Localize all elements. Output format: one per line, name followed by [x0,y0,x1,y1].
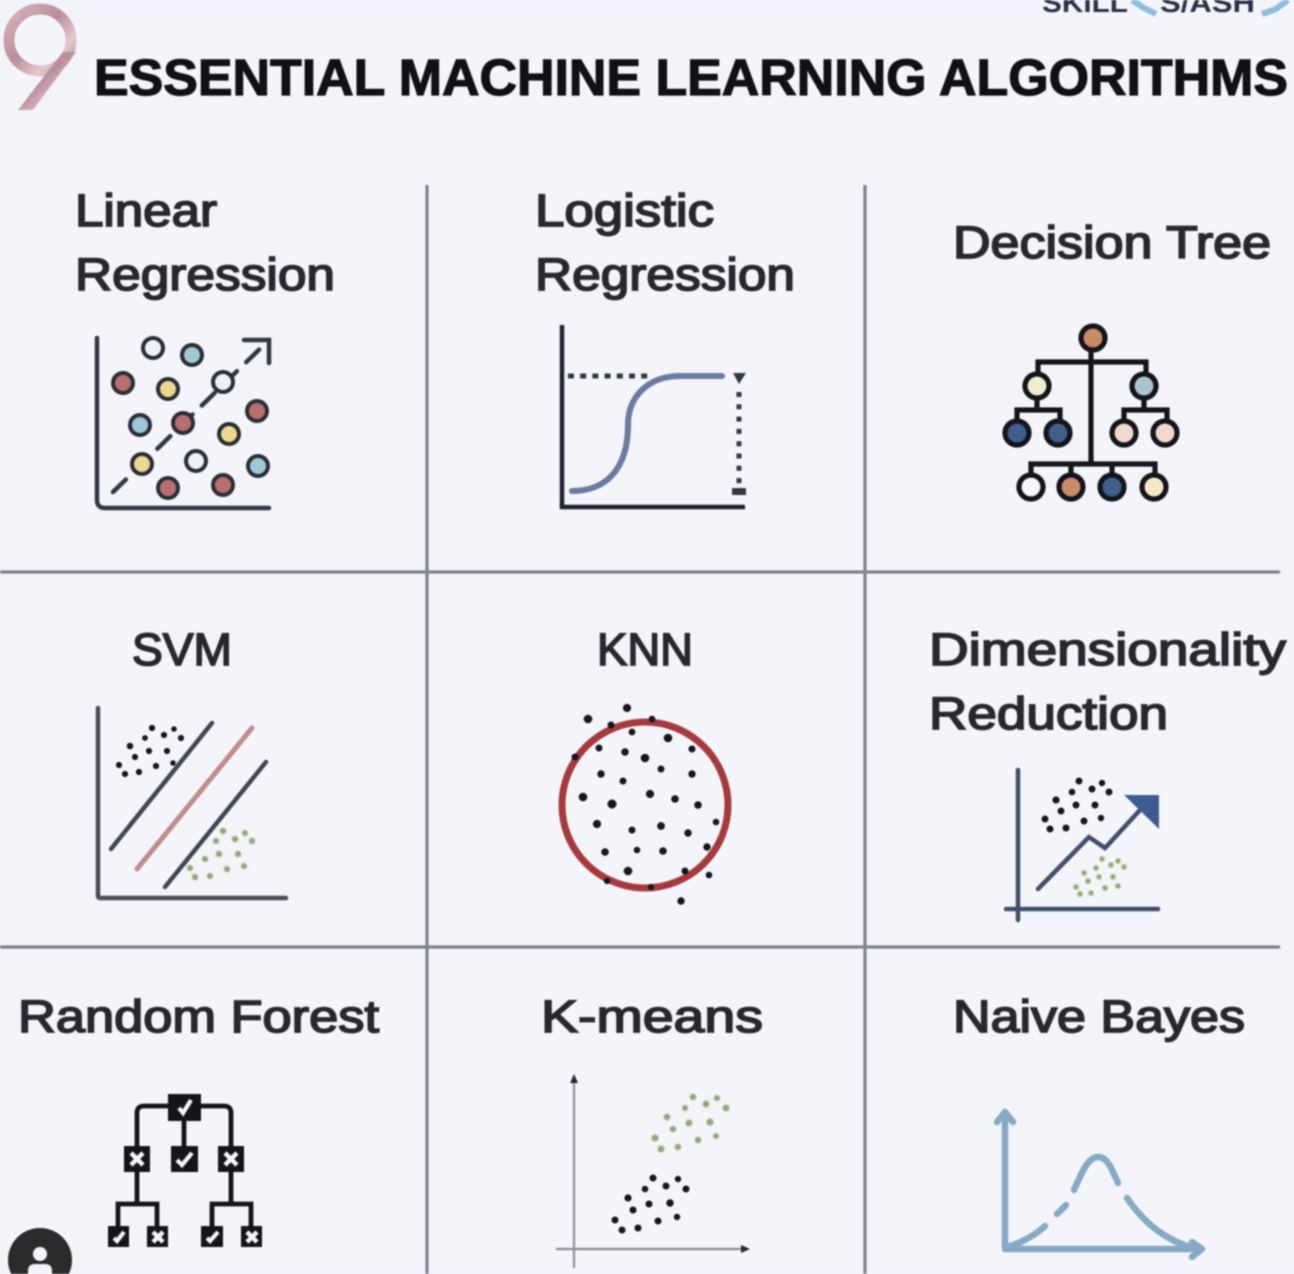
panel: decision tree [953,217,1271,499]
icon: neighbourhood circle with points [562,704,728,904]
icon: sigmoid curve chart [562,325,746,507]
panel: dimensionality reduction [929,624,1287,920]
heading: dimensionality reduction: Reduction [929,688,1168,739]
icon: rose gold numeral 9 [9,9,76,110]
heading: k-means: K-means [541,991,763,1042]
heading: dimensionality reduction: Dimensionality [929,624,1287,675]
heading: logistic regression [535,185,795,300]
panel: KNN [562,624,728,904]
icon: reduction chart with arrow [1006,770,1159,920]
heading: dimensionality reduction [929,624,1287,739]
heading: decision tree: Decision Tree [953,217,1271,268]
heading: naive bayes: Naive Bayes [953,991,1245,1042]
icon: scatter plot with trend line [97,338,269,508]
heading: SVM: SVM [132,624,232,675]
panel: random forest [18,991,380,1247]
icon: probability distribution curve [997,1112,1202,1257]
heading: logistic regression: Logistic [535,185,714,236]
icon: decision tree diagram [1005,326,1177,499]
icon: random forest tree of check and cross boxes [108,1094,262,1247]
icon: support vector margin chart [98,708,286,898]
heading: linear regression: Linear [75,185,217,236]
heading: KNN: KNN [597,624,693,675]
panel: naive bayes [953,991,1245,1257]
title: ESSENTIAL MACHINE LEARNING ALGORITHMS [94,49,1288,106]
icon: k-means clusters [556,1074,750,1268]
icon: user avatar badge [8,1228,72,1274]
heading: linear regression [75,185,335,300]
panel: k-means [541,991,763,1268]
panel: logistic regression [535,185,795,507]
panel: SVM [98,624,286,898]
logo: Skill Slash [1042,0,1288,18]
panel: linear regression [75,185,335,508]
heading: logistic regression: Regression [535,249,795,300]
heading: linear regression: Regression [75,249,335,300]
heading: random forest: Random Forest [18,991,380,1042]
